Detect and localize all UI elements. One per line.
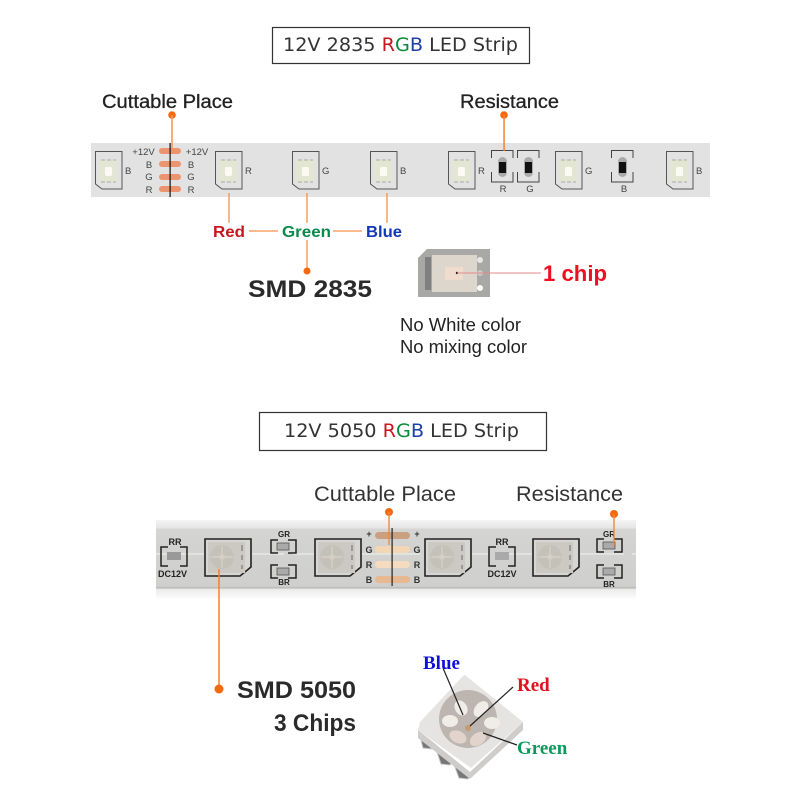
icon: resistor G [518,150,539,195]
icon: LED package B [96,152,131,189]
icon: LED package G: G [585,166,592,177]
label: Resistance 5050 [516,483,623,546]
cut pads 5050: B [366,575,373,585]
icon: 5050 LED 4 [533,539,579,576]
icon: 5050 LED 3 [425,539,471,576]
callout: Blue [423,653,463,715]
text: no white, no mixing [400,315,527,357]
panel: 5050 strip [156,520,636,598]
icon: resistors group 1 [271,530,296,587]
panel: 2835 strip [91,143,710,197]
label: SMD 5050 3 Chips: 3 Chips [274,710,356,737]
label: SMD 2835: SMD 2835 [248,276,372,303]
icon: resistor G: G [526,184,534,195]
icon: DC12V resistor right: RR [496,537,509,547]
cut pads with labels: G [145,172,153,183]
cut pads 5050: R [414,560,421,570]
title: 12V 2835 RGB LED Strip: 12V 2835 RGB LED Strip [283,34,518,56]
icon: 5050 LED 2 [315,539,361,576]
icon: resistors group 2 [597,530,622,589]
label: Resistance 5050: Resistance [516,483,623,506]
cut pads 5050: G [413,545,421,555]
label: Cuttable Place 5050: Cuttable Place [314,483,456,506]
label: Cuttable Place [102,92,233,148]
callout: Green: Green [517,738,568,759]
icon: resistors group 2: BR [603,580,615,589]
cut pads 5050: + [366,529,372,539]
icon: DC12V resistor right: DC12V [488,569,516,579]
cut pads with labels: +12V [132,147,155,158]
label: Resistance [460,92,559,151]
icon: 5050 LED 1 [205,539,251,576]
icon: LED package G: G [322,166,329,177]
icon: resistors group 1: BR [278,578,290,587]
icon: 5050 chip [418,675,523,779]
icon: LED package B [370,152,406,189]
icon: resistor R: R [500,184,507,195]
cut pads 5050: R [366,560,373,570]
icon: LED package B: B [696,166,702,177]
label: SMD 5050 3 Chips: SMD 5050 [237,677,356,704]
icon: LED package R [216,152,252,189]
icon: resistors group 1: GR [278,530,290,539]
title: 12V 2835 RGB LED Strip [272,28,530,64]
icon: resistor B [612,150,633,195]
icon: LED package G [292,152,329,189]
cut pads with labels: B [146,160,152,171]
cut pads 5050 [365,528,421,586]
cut pads with labels: G [187,172,195,183]
callout: Green [483,733,568,759]
callout: Blue: Blue [423,653,460,674]
RGB callouts: Blue [366,224,402,241]
icon: 2835 chip [418,249,490,297]
icon: resistor R [492,150,513,195]
icon: LED package B: B [125,166,131,177]
label: Cuttable Place: Cuttable Place [102,92,233,113]
RGB callouts: Green [282,224,331,241]
icon: resistors group 2: GR [603,530,615,539]
callout: Red: Red [517,675,550,696]
icon: LED package B: B [400,166,406,177]
cut pads with labels: +12V [186,147,209,158]
icon: DC12V resistor left [158,537,187,579]
RGB callouts [213,193,402,274]
icon: resistor B: B [621,184,627,195]
callout: 1 chip: 1 chip [543,261,607,286]
icon: DC12V resistor left: DC12V [158,569,187,579]
icon: LED package G [556,152,592,189]
title: 12V 5050 RGB LED Strip: 12V 5050 RGB LED Strip [284,420,519,442]
label: Cuttable Place 5050 [314,483,456,545]
icon: LED package R [448,152,485,189]
label: Resistance: Resistance [460,92,559,113]
icon: DC12V resistor right [488,537,516,579]
text: no white, no mixing: No White color [400,315,521,335]
RGB callouts: Red [213,224,245,241]
cut pads with labels: R [188,185,195,196]
icon: LED package R: R [245,166,252,177]
cut pads with labels: B [188,160,194,171]
text: no white, no mixing: No mixing color [400,337,527,357]
cut pads with labels [132,143,209,197]
callout: Red [470,675,550,726]
icon: LED package B [666,152,702,189]
icon: LED package R: R [478,166,485,177]
title: 12V 5050 RGB LED Strip [260,412,546,450]
cut pads 5050: G [365,545,373,555]
icon: DC12V resistor left: RR [168,537,182,547]
cut pads 5050: + [414,529,420,539]
callout: SMD 5050 leader [214,569,224,694]
cut pads with labels: R [146,185,153,196]
label: SMD 5050 3 Chips [237,677,356,737]
cut pads 5050: B [414,575,421,585]
